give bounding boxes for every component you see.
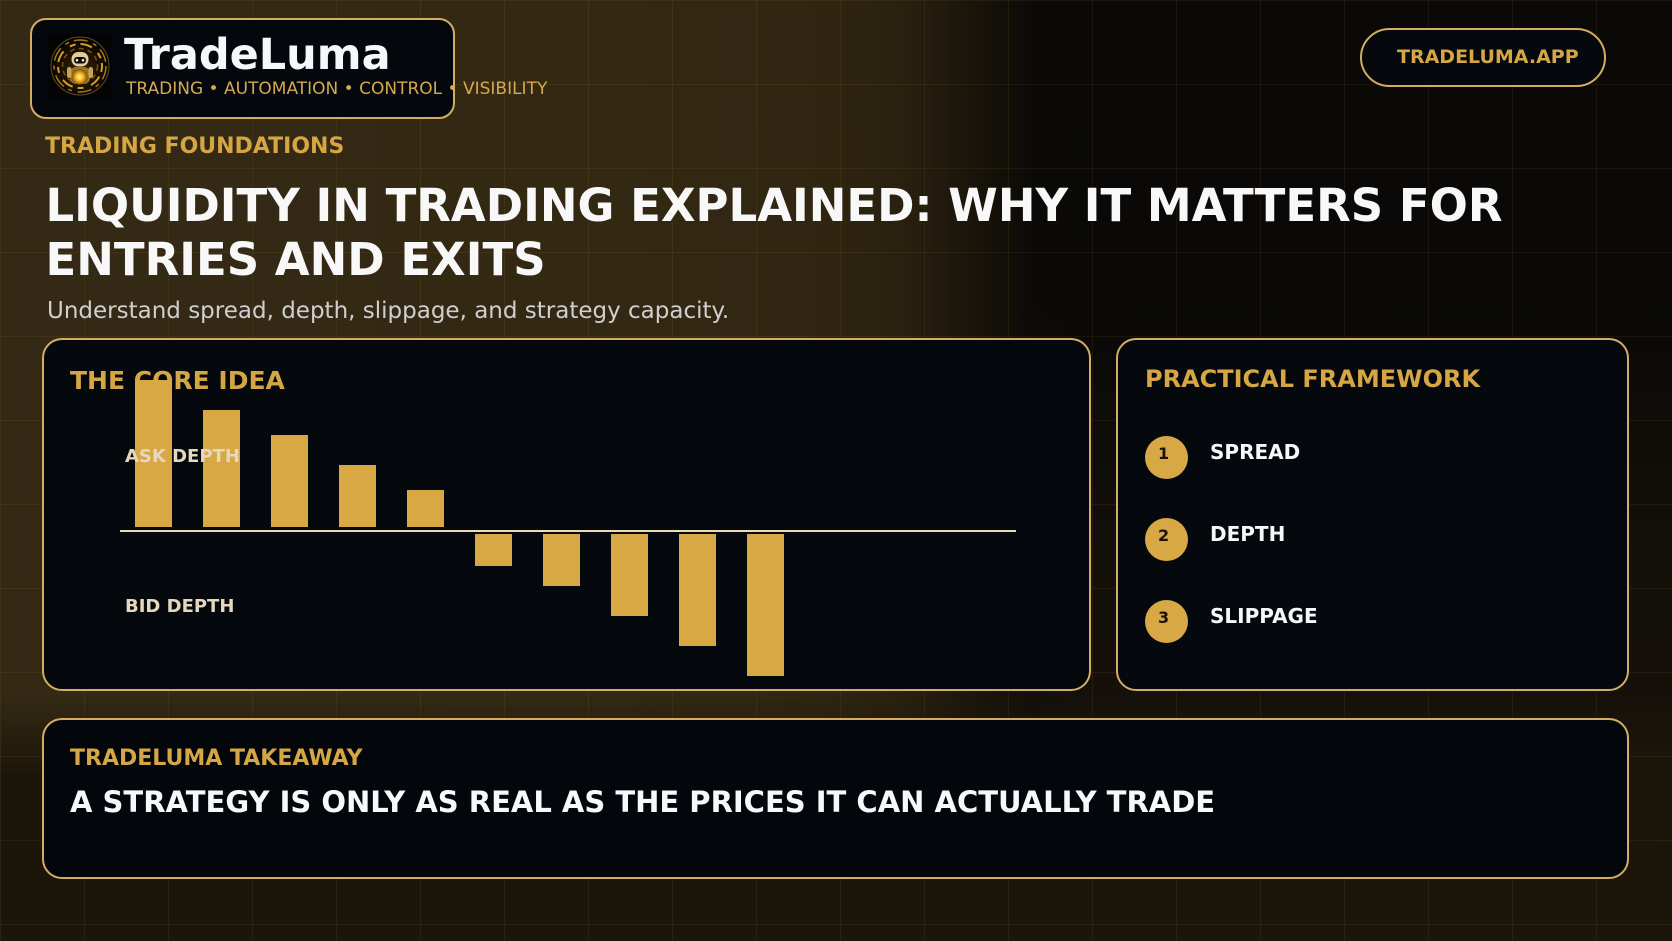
brand lockup <box>30 18 548 119</box>
panel: takeaway <box>42 718 1629 879</box>
panel heading: PRACTICAL FRAMEWORK <box>1145 365 1480 393</box>
panel: the core idea <box>42 338 1091 691</box>
panel: practical framework <box>1116 338 1629 691</box>
step 3: SLIPPAGE <box>1210 604 1318 628</box>
step 1 <box>1145 436 1300 479</box>
step 2 <box>1145 518 1285 561</box>
step 3 <box>1145 600 1318 643</box>
step 1: SPREAD <box>1210 440 1300 464</box>
step 2: DEPTH <box>1210 522 1285 546</box>
step 2: 2 <box>1158 526 1169 545</box>
subtitle: Understand spread, depth, slippage, and strategy capacity. <box>47 298 729 324</box>
brand tagline: TRADING • AUTOMATION • CONTROL • VISIBILITY <box>126 79 547 99</box>
logo panel <box>30 18 455 119</box>
takeaway statement: A STRATEGY IS ONLY AS REAL AS THE PRICES IT CAN ACTUALLY TRADE <box>70 785 1215 819</box>
step 3: 3 <box>1158 608 1169 627</box>
depth chart: BID DEPTH <box>125 596 234 617</box>
panel heading: THE CORE IDEA <box>70 366 285 395</box>
depth chart: ASK DEPTH <box>125 446 240 467</box>
title <box>46 179 1502 286</box>
step 1: 1 <box>1158 444 1169 463</box>
title: ENTRIES AND EXITS <box>46 233 546 286</box>
eyebrow: TRADING FOUNDATIONS <box>45 134 344 159</box>
depth chart <box>120 380 1016 676</box>
website label: TRADELUMA.APP <box>1397 46 1579 68</box>
website pill <box>1360 28 1606 87</box>
brand name: TradeLuma <box>124 30 391 80</box>
title: LIQUIDITY IN TRADING EXPLAINED: WHY IT MATTERS FOR <box>46 179 1502 232</box>
takeaway label: TRADELUMA TAKEAWAY <box>70 746 363 771</box>
icon: robot logo <box>50 36 110 96</box>
